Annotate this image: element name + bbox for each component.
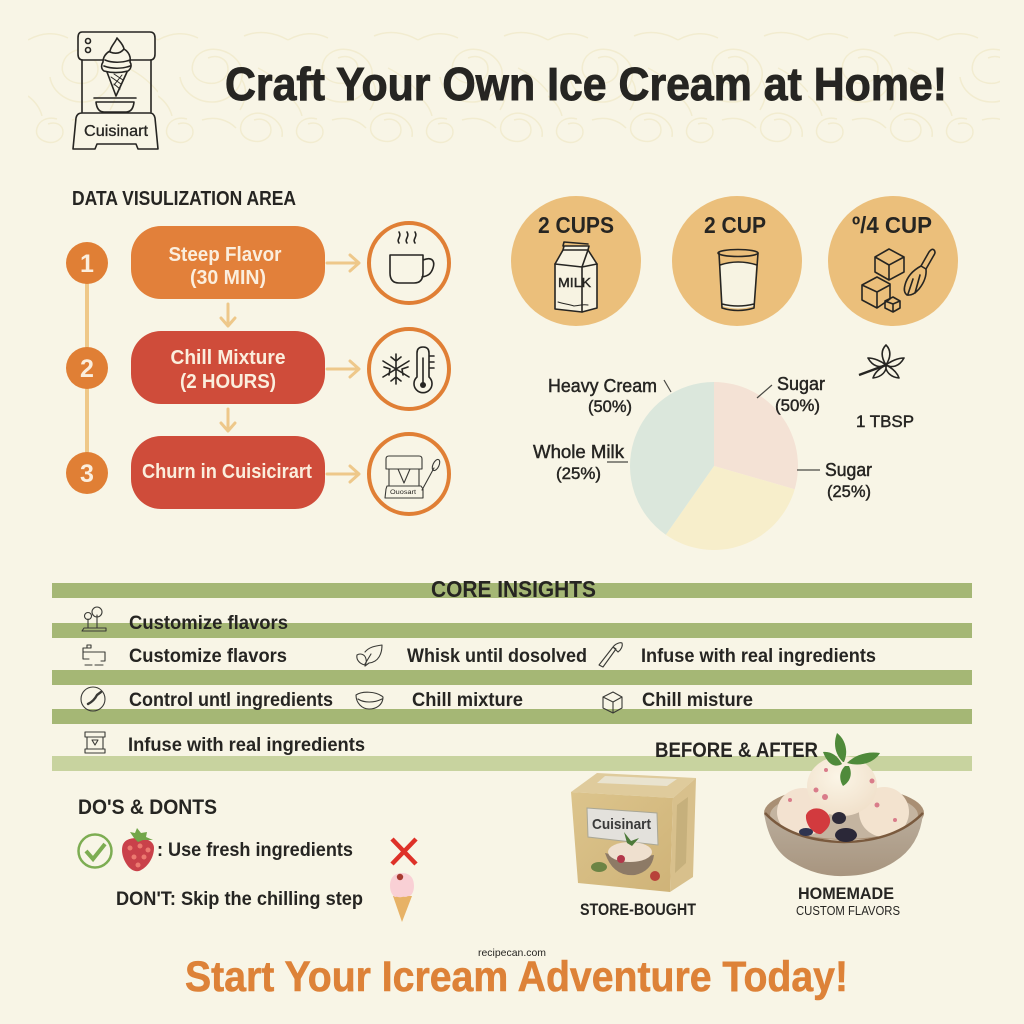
store-bought box [571,773,696,892]
label: store-bought: STORE-BOUGHT [580,900,697,919]
homemade ice cream bowl [764,733,924,876]
step 1 [66,226,325,299]
source credit: recipecan.com [478,947,546,959]
heading: before and after: BEFORE & AFTER [655,739,818,762]
icon: vanilla flower [859,345,904,378]
heading: core insights: CORE INSIGHTS [431,576,596,602]
don't: red cross [392,839,416,864]
label: homemade custom flavors: CUSTOM FLAVORS [796,903,900,918]
insight rows: Whisk until dosolved [407,645,587,667]
pie labels: Heavy Cream [548,376,657,396]
icon: ice cream machine with spoon: Ouosart [390,489,416,496]
header band with swirl pattern [28,28,1000,153]
pie labels: (25%) [827,482,871,501]
pie labels: Sugar [825,460,872,480]
icon: ice cream cone [390,873,414,922]
ingredient: 3/4 cup sugar and whisk: º/4 CUP [852,212,932,238]
don't: skip the chilling step: DON'T: Skip the chilling step [116,888,363,910]
step 1: 1 [80,250,94,278]
step connector line [85,263,89,473]
insight rows: Infuse with real ingredients [641,645,876,667]
green bars [52,583,972,771]
do: check, raspberry, use fresh ingredients [78,828,353,871]
do: check, raspberry, use fresh ingredients: : Use fresh ingredients [157,839,353,861]
store-bought box: Cuisinart [592,816,651,833]
icon: steaming cup [369,223,449,303]
step 3: 3 [80,460,94,488]
label: homemade custom flavors: HOMEMADE [798,884,894,903]
icon: ice cream machine with spoon [369,434,449,514]
pie labels [533,374,872,501]
insight rows: Infuse with real ingredients [128,734,365,756]
title: Craft Your Own Ice Cream at Home! [225,58,947,110]
pie chart [607,380,820,550]
pie labels: Sugar [777,374,825,394]
pie labels: (50%) [775,396,820,415]
insight rows: Customize flavors [129,645,287,667]
step 1: Steep Flavor [168,244,282,266]
step 2 [66,331,325,404]
label: 1 TBSP: 1 TBSP [856,412,914,431]
step 3 [66,436,325,509]
step 3: Churn in Cuisicirart [142,461,312,483]
insight rows: Chill mixture [412,689,523,711]
ingredient: 2 cups milk [511,196,641,326]
pie labels: (50%) [588,397,632,416]
heading: do's and don'ts: DO'S & DONTS [78,796,217,819]
call to action footer: Start Your Icream Adventure Today! [185,953,848,1001]
insight rows: Customize flavors [129,612,288,634]
ingredient: 3/4 cup sugar and whisk [828,196,958,326]
ingredient: 2 cups milk: MILK [558,275,591,290]
insight icons [81,607,622,753]
pie labels: Whole Milk [533,442,625,462]
label: homemade custom flavors [796,884,900,918]
ingredient: 2 cups milk: 2 CUPS [538,212,614,238]
insight rows: Control untl ingredients [129,689,333,711]
step 2: 2 [80,355,94,383]
step 1: (30 MIN) [190,267,266,289]
insight rows [128,612,876,756]
ingredient: 2 cup glass [672,196,802,326]
step 2: (2 HOURS) [180,371,276,393]
pie labels: (25%) [556,464,601,483]
icon: Cuisinart ice cream machine logo [73,32,158,149]
ingredient: 2 cup glass: 2 CUP [704,212,766,238]
icon: Cuisinart ice cream machine logo: Cuisinart [84,123,149,140]
arrows between steps and icons [221,255,359,482]
section heading: data visualization: DATA VISULIZATION AREA [72,188,296,210]
icon: snowflake and thermometer [369,329,449,409]
insight rows: Chill misture [642,689,753,711]
step 2: Chill Mixture [170,347,286,369]
